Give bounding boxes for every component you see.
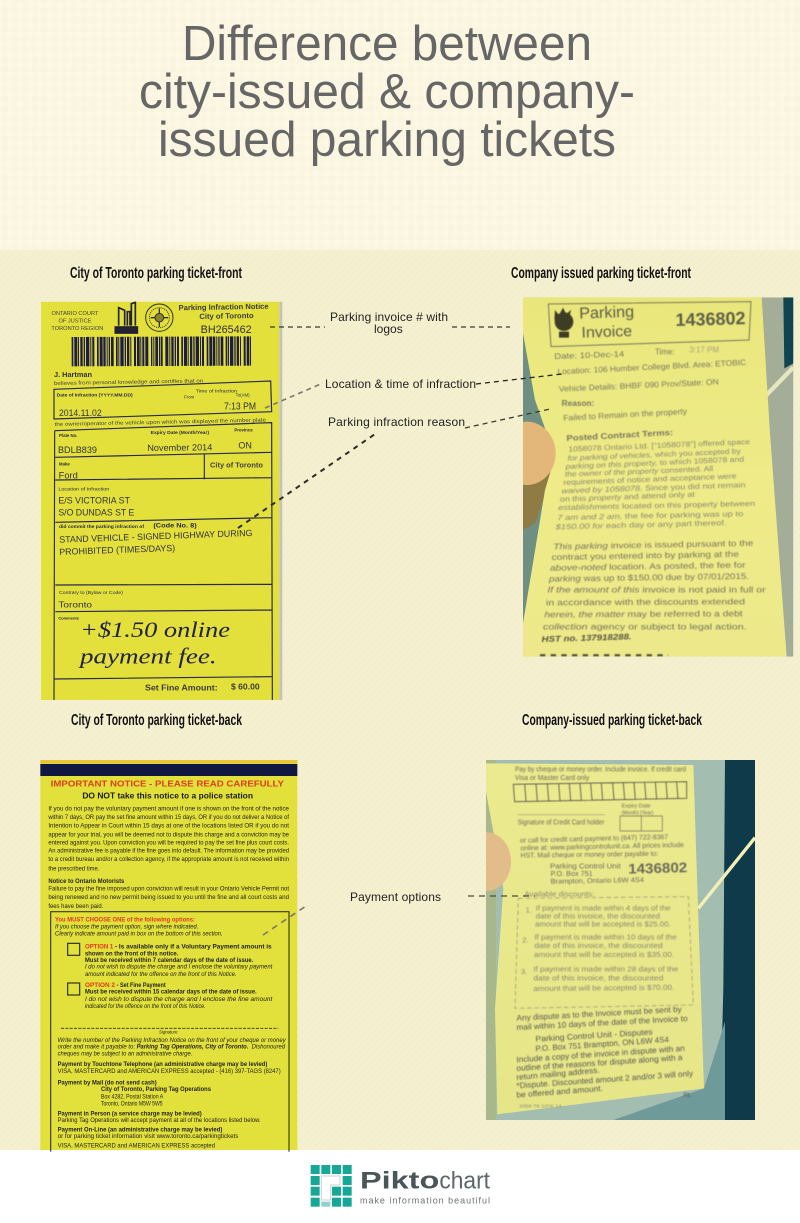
vehicle details: Ford bbox=[59, 470, 78, 480]
invoice notice: contract you entered into by parking at the bbox=[552, 549, 739, 562]
invoice details: Time: bbox=[655, 348, 675, 357]
option 2: I do not wish to dispute the charge and I enclose the fine amount bbox=[85, 997, 273, 1003]
icon: Piktochart mark bbox=[311, 1165, 352, 1207]
payment options box: Toronto, Ontario M5W 5W5 bbox=[101, 1101, 163, 1107]
panel: city of Toronto ticket front: the owner/operator of the vehicle upon which was displayed the number plate bbox=[55, 418, 266, 428]
payment options box: Clearly indicate amount paid in box on the bottom of this section. bbox=[55, 931, 223, 937]
invoice notice: collection agency or subject to legal action. bbox=[543, 621, 747, 631]
posted contract terms: waived by 1058078. Since you did not remain bbox=[561, 480, 746, 495]
ticket paper bbox=[486, 763, 704, 1114]
black header band bbox=[40, 764, 297, 776]
invoice details: Failed to Remain on the property bbox=[563, 407, 687, 423]
date and time box bbox=[54, 381, 272, 419]
dispute instructions: be offered and amount. bbox=[516, 1084, 603, 1100]
invoice details: 3:17 PM bbox=[689, 346, 719, 355]
payment instructions: Parking Control Unit bbox=[550, 863, 621, 870]
court name: OF JUSTICE bbox=[58, 319, 92, 325]
option 1: OPTION 1 bbox=[85, 944, 114, 950]
warning paragraph: Notice to Ontario Motorists bbox=[48, 878, 125, 885]
infraction description: STAND VEHICLE - SIGNED HIGHWAY DURING bbox=[59, 528, 253, 545]
callout: parking invoice number with logos: logos bbox=[374, 322, 403, 336]
option 2: - Set Fine Payment bbox=[117, 983, 166, 989]
panel: city of Toronto ticket front: BH265462 bbox=[201, 324, 252, 336]
heading: company ticket front: Company issued parking ticket-front bbox=[511, 265, 691, 282]
warning paragraph: to a credit bureau and/or a collection agency, if the appropriate amount is not received within bbox=[48, 856, 289, 863]
payment options box: Parking Tag Operations will accept payment at all of the locations listed below. bbox=[58, 1118, 261, 1124]
credit card section: Pay by cheque or money order. Include invoice. If credit card bbox=[515, 767, 686, 774]
notice heading: DO NOT take this notice to a police station bbox=[82, 791, 253, 800]
dispute instructions: mail within 10 days of the date of the Invoice to bbox=[516, 1014, 688, 1032]
vehicle details: Make bbox=[59, 462, 70, 467]
dispute instructions: P.O. Box 751 Brampton, ON L6W 4S4 bbox=[535, 1035, 670, 1053]
payment instructions: P.O. Box 751 bbox=[551, 871, 593, 878]
callout: parking infraction reason: Parking infraction reason bbox=[328, 415, 465, 429]
available discounts: If payment is made within 10 days of the bbox=[534, 933, 677, 942]
warning paragraph: the prescribed time. bbox=[48, 865, 100, 872]
invoice notice: parking was up to $150.00 due by 07/01/2015. bbox=[548, 571, 749, 584]
callout: parking infraction reason bbox=[238, 409, 550, 528]
callout: payment options: Payment options bbox=[350, 890, 441, 904]
issuing officer: J. Hartman bbox=[54, 370, 93, 379]
payment options box: VISA, MASTERCARD and AMERICAN EXPRESS accepted - (416) 397-TAGS (8247) bbox=[58, 1069, 281, 1075]
handwritten comments: Comments bbox=[58, 616, 80, 621]
wordmark: chart bbox=[439, 1167, 490, 1194]
posted contract terms: 7 am and 2 am, the fee for parking was up to bbox=[557, 509, 743, 522]
warning paragraph: entered against you. Upon conviction you will be required to pay the set fine plus court costs. bbox=[48, 840, 289, 847]
posted contract terms: $150.00 for each day or any part thereof. bbox=[554, 518, 727, 531]
invoice header bbox=[548, 302, 751, 347]
payment options box: Dishonoured bbox=[252, 1045, 286, 1051]
notice heading bbox=[179, 302, 269, 321]
court name: TORONTO REGION bbox=[51, 326, 103, 332]
option 1: Must be received within 7 calendar days of the date of issue. bbox=[85, 958, 254, 964]
wordmark: make information beautiful bbox=[360, 1195, 490, 1205]
panel: city of Toronto ticket front: believes from personal knowledge and certifies that on bbox=[54, 378, 203, 387]
credit card section bbox=[513, 767, 687, 831]
vehicle details: City of Toronto bbox=[210, 461, 263, 470]
invoice notice: in accordance with the discounts extended bbox=[546, 596, 745, 607]
payment options box bbox=[51, 912, 289, 1152]
posted contract terms: parking on this property, to which 1058078 and bbox=[564, 455, 744, 471]
option 1: - Is available only if a Voluntary Payment amount is bbox=[115, 944, 272, 950]
payment options box: City of Toronto, Parking Tag Operations bbox=[101, 1087, 212, 1093]
available discounts bbox=[515, 889, 693, 1008]
warning paragraph: being renewed and no new permit being issued to you until the fine and all court costs and bbox=[48, 894, 289, 901]
vehicle details: Plate No. bbox=[59, 433, 78, 438]
payment options box: Signature bbox=[159, 1029, 178, 1034]
available discounts: Available discounts: bbox=[524, 889, 594, 898]
payment instructions: Brampton, Ontario L6W 4S4 bbox=[551, 877, 644, 886]
option 2: OPTION 2 bbox=[85, 983, 116, 989]
available discounts: 2. bbox=[522, 935, 528, 944]
invoice details: Posted Contract Terms: bbox=[566, 427, 673, 443]
payment options box: If you choose the payment option, sign where indicated. bbox=[55, 924, 198, 930]
date and time box: Time of Infraction bbox=[196, 388, 238, 393]
wordmark: Pikto bbox=[360, 1167, 439, 1194]
vehicle details: BDLB839 bbox=[58, 445, 97, 455]
warning paragraph: If you do not pay the voluntary payment amount if one is shown on the front of the notice bbox=[48, 805, 289, 812]
available discounts: date of this invoice, the discounted bbox=[536, 912, 660, 921]
location of infraction: S/O DUNDAS ST E bbox=[58, 508, 134, 518]
invoice details: Reason: bbox=[562, 399, 594, 408]
available discounts: amount that will be accepted is $35.00. bbox=[534, 950, 674, 959]
set fine amount bbox=[145, 684, 260, 690]
posted contract terms bbox=[554, 437, 755, 531]
panel: city of Toronto ticket back bbox=[40, 760, 297, 1152]
warning paragraph: Failure to pay the fine imposed upon conviction will result in your Ontario Vehicle Permit not bbox=[48, 885, 289, 892]
payment options box: order and make it payable to: bbox=[58, 1045, 135, 1051]
dispute instructions: return mailing address. bbox=[516, 1066, 600, 1082]
option 1 bbox=[68, 943, 273, 978]
panel: company issued ticket back bbox=[462, 760, 755, 1120]
vehicle details bbox=[58, 427, 263, 480]
posted contract terms: on this property and attend only at bbox=[560, 490, 695, 504]
available discounts: date of this invoice, the discounted bbox=[534, 941, 663, 950]
invoice notice: herein, the matter may be referred to a debt bbox=[544, 608, 744, 619]
invoice header: 1436802 bbox=[675, 308, 746, 330]
court name: ONTARIO COURT bbox=[52, 311, 99, 317]
heading: company ticket back: Company-issued parking ticket-back bbox=[522, 712, 702, 729]
invoice notice: above-noted location. As posted, the fee for bbox=[550, 560, 746, 573]
title: issued parking tickets bbox=[158, 113, 616, 167]
date and time box: 7:13 PM bbox=[224, 402, 256, 413]
dispute instructions: RL bbox=[683, 1092, 692, 1099]
infraction description: PROHIBITED (TIMES/DAYS) bbox=[59, 543, 175, 557]
title: Difference between bbox=[182, 17, 592, 71]
title bbox=[139, 17, 635, 167]
vehicle details: ON bbox=[238, 440, 252, 450]
warning paragraph: An administrative fee is payable if the fine goes into default. The information may be provided bbox=[48, 848, 289, 855]
posted contract terms: establishments located on this property between bbox=[558, 499, 755, 512]
dispute instructions: Any dispute as to the Invoice must be sent by bbox=[516, 1005, 682, 1023]
dispute instructions bbox=[516, 1005, 693, 1110]
credit card section: Signature of Credit Card holder bbox=[518, 819, 605, 826]
credit card section: Visa or Master Card only bbox=[515, 775, 590, 782]
vehicle details: Province bbox=[234, 427, 253, 432]
payment options box: You MUST CHOOSE ONE of the following options: bbox=[55, 918, 195, 924]
infraction description bbox=[59, 523, 253, 557]
date and time box: To(AM) bbox=[236, 393, 250, 398]
warning paragraph bbox=[47, 805, 289, 910]
payment instructions: HST. Mail cheque or money order payable to: bbox=[521, 851, 658, 860]
infraction description: did commit the parking infraction of bbox=[59, 524, 145, 529]
callout: parking invoice number with logos: Parking invoice # with bbox=[330, 310, 448, 324]
handwritten comments: payment fee. bbox=[78, 643, 217, 668]
dispute instructions: outline of the reasons for dispute along with a bbox=[516, 1053, 683, 1073]
payment options box: Box 4282, Postal Station A bbox=[101, 1095, 163, 1101]
court name bbox=[52, 311, 103, 330]
payment options box: VISA, MASTERCARD and AMERICAN EXPRESS accepted bbox=[58, 1143, 215, 1149]
wordmark bbox=[360, 1167, 490, 1205]
payment instructions: 1436802 bbox=[628, 859, 688, 877]
callout: location and time of infraction: Location & time of infraction bbox=[325, 377, 476, 391]
callout: location and time of infraction bbox=[265, 374, 562, 408]
payment options box: Payment in Person (a service charge may be levied) bbox=[58, 1111, 202, 1117]
icon: company crest bbox=[554, 308, 573, 338]
invoice details: Date: 10-Dec-14 bbox=[554, 350, 625, 361]
option 2: Must be received within 15 calendar days of the date of issue. bbox=[85, 990, 257, 996]
payment options box: Write the number of the Parking Infraction Notice on the front of your cheque or money bbox=[58, 1038, 287, 1044]
invoice header: Parking bbox=[579, 304, 634, 323]
posted contract terms: requirements of notice and acceptance were bbox=[563, 471, 737, 487]
payment instructions bbox=[520, 834, 688, 886]
invoice notice bbox=[541, 538, 766, 644]
header background bbox=[0, 0, 800, 250]
option 1: amount indicated for the offence on the front of this Notice. bbox=[85, 972, 237, 978]
invoice details: Location: 106 Humber College Blvd. Area: ETOBIC bbox=[557, 358, 746, 376]
credit card section: Expiry Date bbox=[622, 803, 651, 809]
title: city-issued & company- bbox=[139, 65, 635, 119]
option 1: I do not wish to dispute the charge and I enclose the voluntary payment bbox=[85, 965, 273, 971]
ticket paper bbox=[523, 297, 787, 657]
bylaw: Contrary to (Bylaw or Code) bbox=[59, 590, 124, 595]
handwritten comments: +$1.50 online bbox=[80, 617, 230, 642]
available discounts: 1. bbox=[526, 905, 532, 914]
invoice notice: HST no. 137918288. bbox=[541, 631, 632, 644]
bylaw bbox=[58, 590, 123, 608]
barcode bbox=[72, 336, 252, 366]
warning paragraph: appear for your trial, you will be deemed not to dispute this charge and a conviction may be bbox=[48, 831, 289, 838]
payment options box: Payment On-Line (an administrative charge may be levied) bbox=[58, 1127, 222, 1133]
payment instructions: online at: www.parkingcontrolunit.ca. All prices include bbox=[521, 842, 684, 852]
payment options box: or for parking ticket information visit www.toronto.ca/parkingtickets bbox=[58, 1134, 238, 1140]
heading: city ticket front: City of Toronto parking ticket-front bbox=[70, 265, 242, 282]
notice heading: IMPORTANT NOTICE - PLEASE READ CAREFULLY bbox=[51, 778, 284, 788]
invoice header: Invoice bbox=[581, 323, 632, 342]
payment options box: Parking Tag Operations, City of Toronto. bbox=[137, 1045, 249, 1051]
icon: thumb bbox=[523, 422, 556, 485]
set fine amount: Set Fine Amount: bbox=[145, 682, 218, 692]
option 1: shown on the front of this notice. bbox=[85, 952, 179, 958]
warning paragraph: within 7 days, OR pay the set fine amount within 15 days, OR if you do not deliver a Notice of bbox=[47, 814, 289, 821]
vehicle details: November 2014 bbox=[147, 442, 212, 453]
available discounts: If payment is made within 28 days of the bbox=[533, 965, 678, 974]
dispute instructions: *Dispute. Discounted amount 2 and/or 3 will only bbox=[516, 1069, 693, 1090]
panel: company issued ticket front bbox=[498, 297, 793, 657]
icon: Toronto crest bbox=[146, 304, 173, 331]
option 2 bbox=[68, 983, 273, 1010]
vehicle details: Expiry Date (Month/Year) bbox=[151, 430, 210, 435]
available discounts: date of this invoice, the discounted bbox=[533, 974, 663, 983]
option 2: indicated for the offence on the front of this Notice. bbox=[85, 1004, 206, 1010]
callout: parking invoice number with logos bbox=[270, 310, 510, 336]
form grid bbox=[54, 423, 272, 700]
warning paragraph: Intention to Appear in Court within 15 days at one of the locations listed OR if you do not bbox=[48, 823, 289, 830]
heading: city ticket back: City of Toronto parking ticket-back bbox=[71, 712, 242, 729]
payment options box: cheques may be subject to an administrative charge. bbox=[58, 1052, 192, 1058]
credit card section: (Month) (Year) bbox=[622, 811, 654, 817]
date and time box: From bbox=[184, 395, 194, 400]
notice heading bbox=[51, 778, 284, 800]
dispute instructions: 1058 76 12/4/ 14 bbox=[519, 1104, 562, 1110]
invoice notice: This parking invoice is issued pursuant to the bbox=[553, 538, 754, 551]
invoice notice: If the amount of this invoice is not paid in full or bbox=[547, 585, 766, 595]
payment options box: Payment by Mail (do not send cash) bbox=[58, 1081, 157, 1087]
location of infraction bbox=[58, 486, 134, 518]
handwritten comments bbox=[58, 616, 230, 668]
warning paragraph: fees have been paid. bbox=[48, 903, 104, 910]
callout: payment options bbox=[263, 890, 535, 935]
invoice details bbox=[554, 346, 746, 443]
dispute instructions: Include a copy of the invoice in dispute with an bbox=[516, 1044, 685, 1064]
logo: Piktochart bbox=[311, 1165, 490, 1207]
payment instructions: or call for credit card payment to (647) 722-8367 bbox=[520, 834, 668, 845]
invoice details: Vehicle Details: BHBF 090 Prov/State: ON bbox=[559, 377, 719, 394]
bylaw: Toronto bbox=[58, 599, 92, 609]
notice heading: Parking Infraction Notice bbox=[179, 302, 269, 312]
posted contract terms: for parking of vehicles, which you accepted by bbox=[567, 446, 741, 463]
notice heading: City of Toronto bbox=[199, 311, 254, 321]
date and time box: 2014.11.02 bbox=[59, 408, 102, 418]
available discounts: amount that will be accepted is $25.00. bbox=[535, 920, 671, 929]
icon: thumb bbox=[486, 832, 511, 891]
posted contract terms: the owner of the property consented. All bbox=[565, 464, 714, 479]
date and time box: Date of Infraction (YYYY.MM.DD) bbox=[57, 392, 133, 397]
icon: Toronto city hall logo bbox=[115, 302, 137, 333]
content background bbox=[0, 250, 800, 1150]
available discounts: 3. bbox=[521, 967, 527, 976]
location of infraction: E/S VICTORIA ST bbox=[58, 495, 130, 505]
infraction description: (Code No. 8) bbox=[153, 523, 197, 530]
posted contract terms: 1058078 Ontario Ltd. ["1058078"] offered space bbox=[568, 437, 750, 454]
dispute instructions: Parking Control Unit - Disputes bbox=[535, 1028, 653, 1044]
available discounts: amount that will be accepted is $70.00. bbox=[533, 983, 674, 993]
location of infraction: Location of Infraction bbox=[58, 486, 110, 491]
set fine amount: $ 60.00 bbox=[231, 682, 260, 692]
payment options box: Payment by Touchtone Telephone (an administrative charge may be levied) bbox=[58, 1062, 267, 1068]
footer background bbox=[0, 1150, 800, 1223]
available discounts: If payment is made within 4 days of the bbox=[536, 903, 671, 912]
panel: city of Toronto ticket front bbox=[41, 302, 282, 700]
